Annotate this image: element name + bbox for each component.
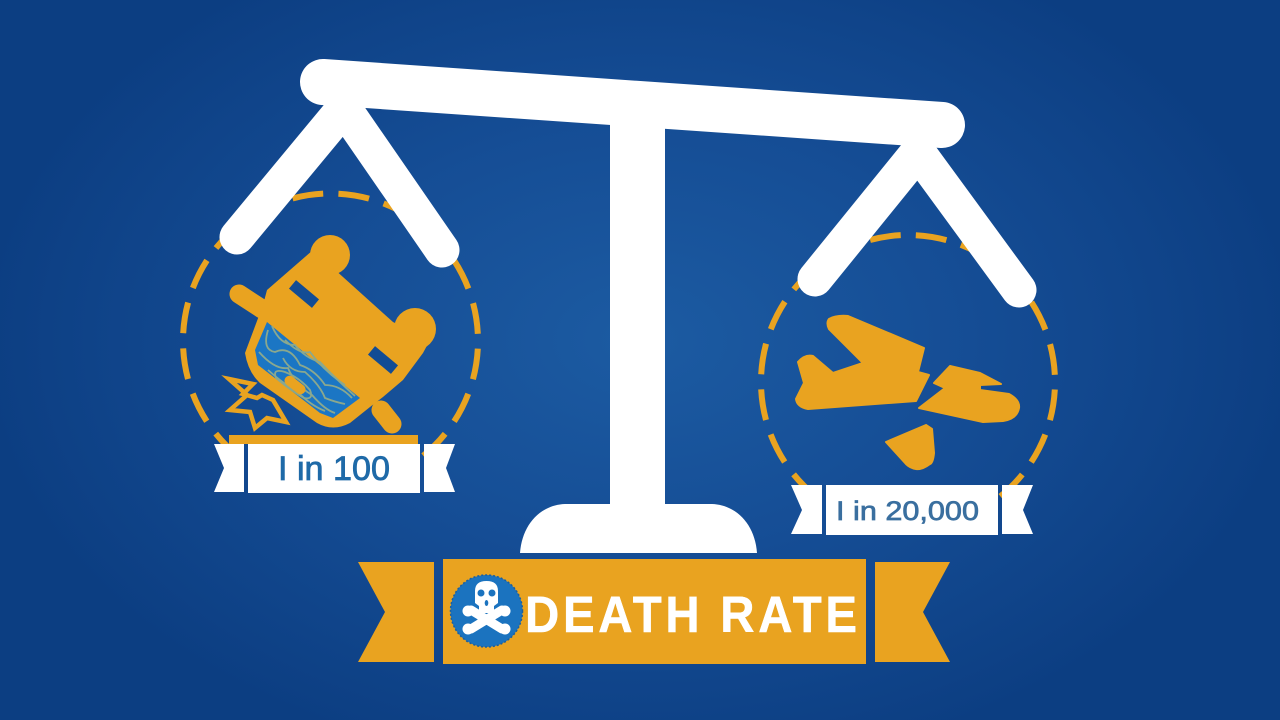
crossbones	[471, 610, 502, 629]
banner right tail	[875, 562, 950, 662]
plane tail section	[796, 316, 929, 409]
windshield badge	[282, 374, 308, 396]
scale beam	[323, 82, 942, 125]
icon: overturned car	[239, 235, 436, 428]
dashed circle: car	[183, 194, 478, 488]
skull eyes and nose	[478, 590, 496, 606]
scale post	[610, 110, 665, 510]
banner title: DEATH RATE	[525, 586, 857, 643]
scale right arms	[815, 152, 1019, 290]
scale	[237, 82, 1019, 553]
banner left tail	[358, 562, 434, 662]
car wheels	[310, 235, 436, 350]
ribbon: 1 in 20,000	[791, 485, 1033, 535]
dashed circle: plane	[761, 235, 1055, 529]
scale base	[520, 504, 757, 553]
ribbon: 1 in 100	[214, 444, 455, 493]
car mirrors	[239, 294, 392, 424]
panel: car crash, 1 in 100	[183, 194, 478, 493]
icon: broken plane	[796, 316, 1019, 469]
banner center	[443, 559, 866, 664]
plane fragment	[886, 425, 934, 469]
icon: impact star	[229, 379, 286, 428]
panel: plane crash, 1 in 20,000	[761, 235, 1055, 535]
car windows	[289, 280, 398, 374]
icon: skull and crossbones badge	[450, 575, 522, 647]
windshield with map pattern	[255, 322, 360, 418]
label: 1 in 100: I in 100	[278, 450, 390, 488]
scale left arms	[237, 108, 442, 250]
car body	[245, 250, 430, 428]
label: 1 in 20,000: I in 20,000	[836, 496, 979, 526]
bone ends	[462, 606, 510, 634]
skull	[475, 581, 498, 613]
plane nose section	[919, 366, 1019, 422]
banner: death rate	[358, 559, 950, 664]
ribbon strip	[229, 435, 418, 444]
